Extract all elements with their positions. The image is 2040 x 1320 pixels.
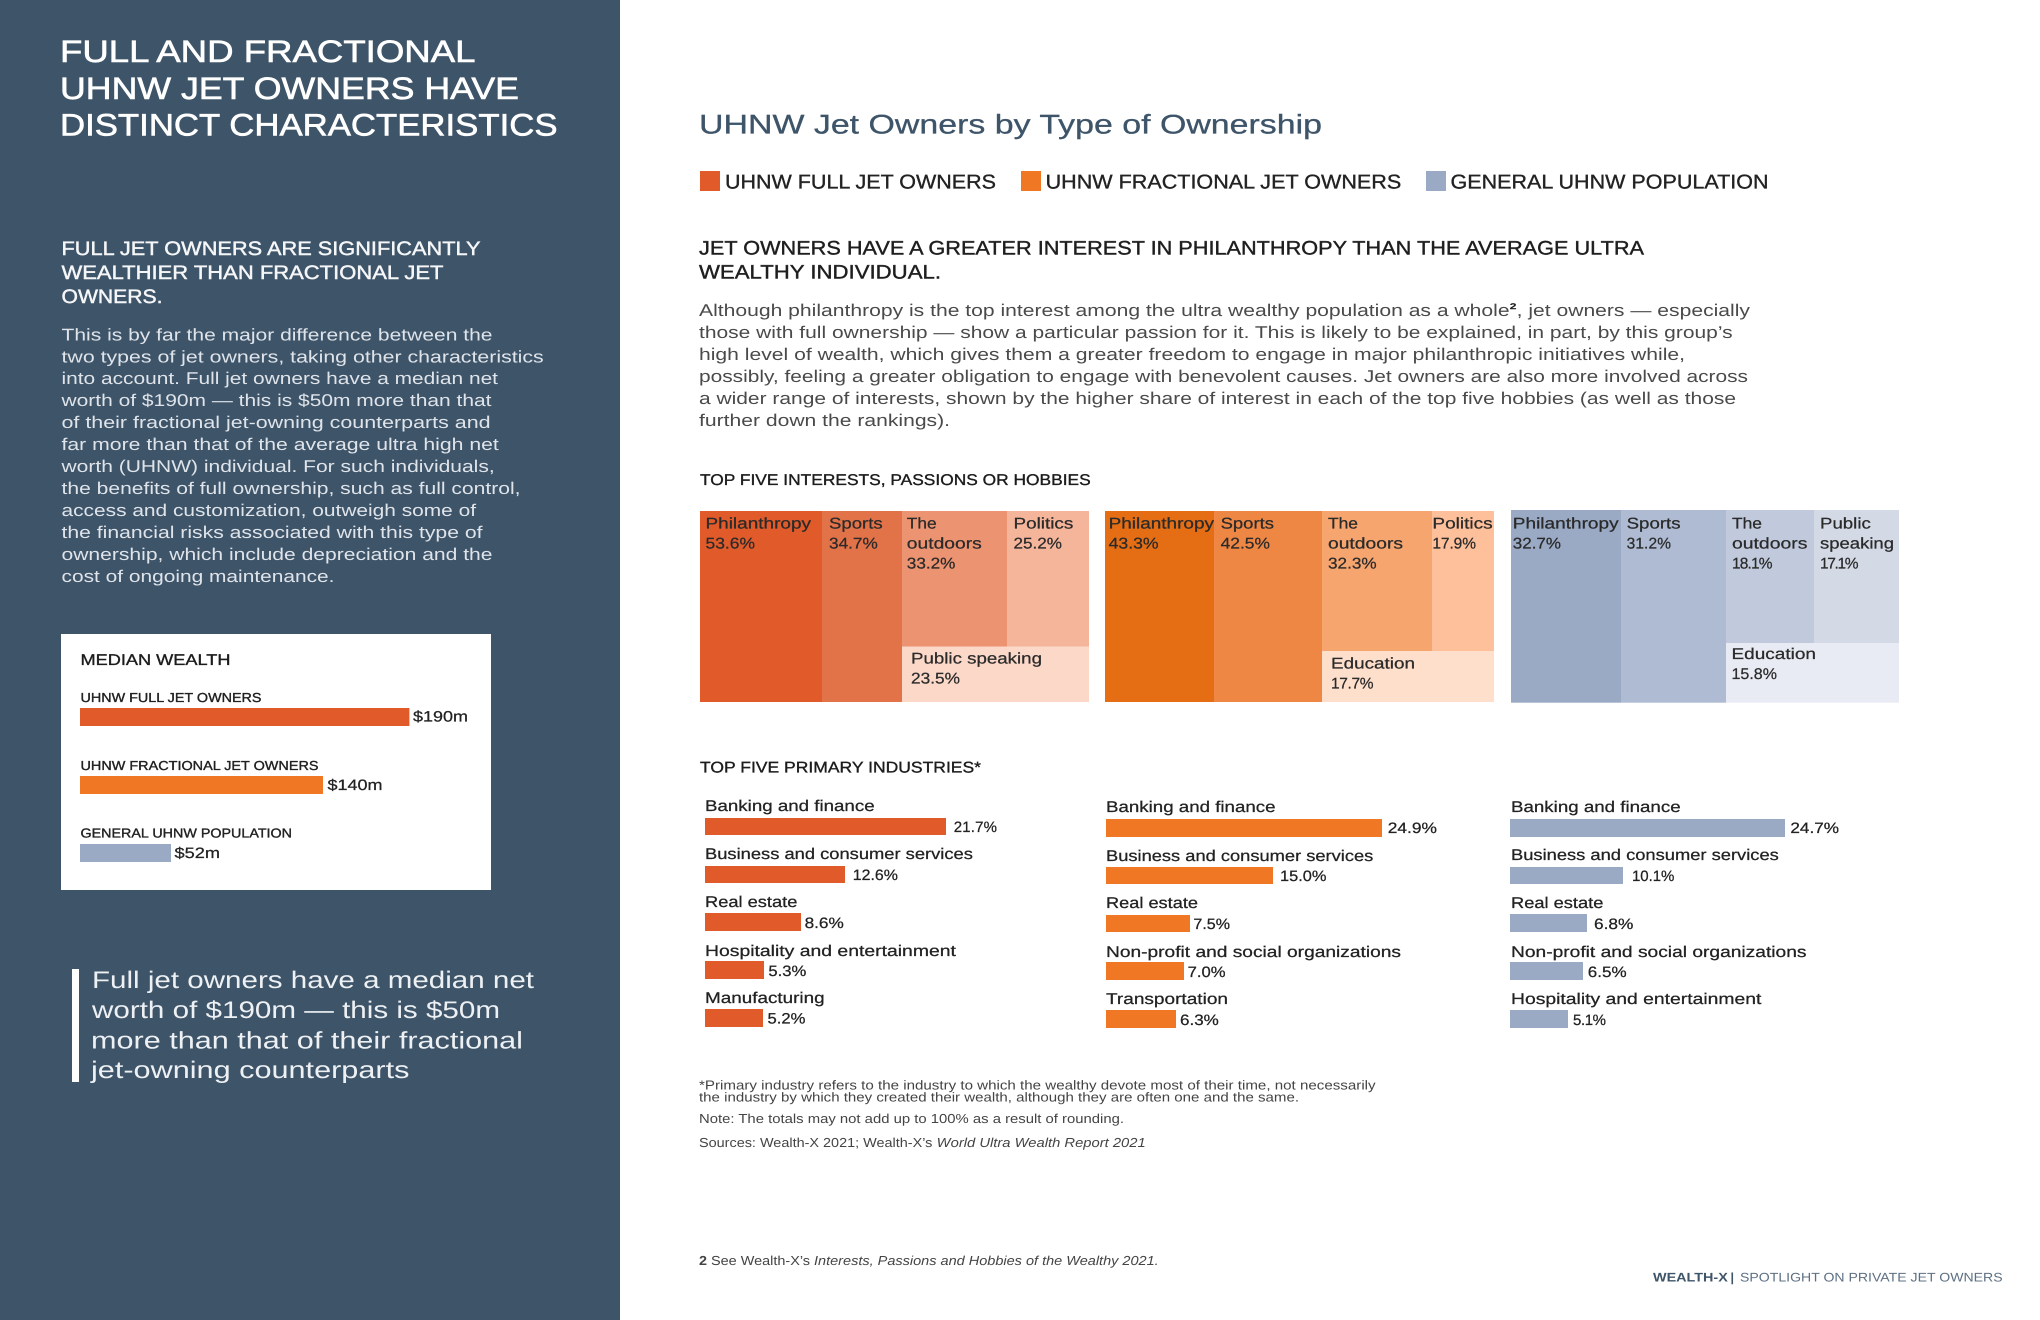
Public speaking 23.5% [902, 647, 1089, 702]
The outdoors 32.3% [1322, 511, 1432, 651]
legend: full owners: UHNW FULL JET OWNERS [725, 172, 996, 194]
Politics 17.9%: 17.9% [1432, 535, 1476, 552]
treemap: general UHNW population [1511, 510, 1899, 703]
bar chart: fractional jet owners industries: Banking and finance [1106, 799, 1276, 816]
legend: general population: GENERAL UHNW POPULATION [1450, 172, 1768, 194]
The outdoors 18.1%: outdoors [1732, 535, 1808, 552]
bar chart: general population industries: 5.1% [1573, 1012, 1606, 1029]
left body text: the benefits of full ownership, such as full control, [62, 479, 520, 498]
bar chart: general population industries: 6.8% [1594, 916, 1633, 933]
left body text: into account. Full jet owners have a median net [62, 369, 498, 388]
page footer: SPOTLIGHT ON PRIVATE JET OWNERS [1740, 1271, 2003, 1285]
philanthropy body text: Although philanthropy is the top interest among the ultra wealthy population as a whole [699, 301, 1352, 320]
The outdoors 33.2%: 33.2% [907, 555, 956, 572]
bar chart: full jet owners industries: 5.3% [768, 963, 806, 980]
Philanthropy 32.7%: Philanthropy [1513, 515, 1619, 532]
Philanthropy 43.3%: Philanthropy [1109, 515, 1214, 532]
title: FULL AND FRACTIONAL [60, 34, 475, 69]
panel: median wealth [61, 634, 491, 890]
left subheading: FULL JET OWNERS ARE SIGNIFICANTLY [62, 238, 480, 260]
bar chart: general population industries: 6.5% [1588, 964, 1627, 981]
bar chart: fractional jet owners industries: 15.0% [1280, 868, 1326, 885]
philanthropy body text: ² [1510, 300, 1517, 319]
left body text: This is by far the major difference between the [62, 325, 492, 344]
industries heading: TOP FIVE PRIMARY INDUSTRIES* [700, 760, 981, 776]
page footnote 2: See Wealth-X’s [711, 1253, 811, 1268]
The outdoors 32.3%: 32.3% [1328, 555, 1377, 572]
bar chart: fractional jet owners industries: Business and consumer services [1106, 848, 1374, 865]
philanthropy body text: a wider range of interests, shown by the higher share of interest in each of the top five hobbies (as well as those [699, 389, 1736, 408]
bar: full owners $190m [80, 690, 468, 726]
bar: fractional owners $140m: UHNW FRACTIONAL JET OWNERS [80, 758, 319, 773]
page footer: WEALTH-X [1653, 1271, 1729, 1285]
legend: fractional owners: UHNW FRACTIONAL JET OWNERS [1046, 172, 1401, 194]
The outdoors 33.2%: The [907, 515, 937, 532]
The outdoors 18.1%: The [1732, 515, 1762, 532]
Public speaking 17.1%: 17.1% [1820, 555, 1859, 572]
bar chart: full jet owners industries: 12.6% [853, 867, 898, 884]
bar chart: general population industries: 24.7% [1790, 820, 1839, 837]
bar chart: full jet owners industries: 5.2% [768, 1010, 805, 1027]
bar chart: fractional jet owners industries: 24.9% [1388, 820, 1437, 837]
bar chart: full jet owners industries: Banking and finance [705, 798, 875, 815]
bar: general population $52m [80, 825, 292, 862]
philanthropy body text [699, 300, 1751, 430]
legend [700, 171, 1768, 194]
left body text: two types of jet owners, taking other characteristics [62, 347, 544, 366]
bar chart: full jet owners industries: Hospitality and entertainment [705, 943, 957, 960]
bar chart: general population industries: 10.1% [1632, 868, 1674, 885]
bar: general population $52m: $52m [174, 845, 220, 862]
title: DISTINCT CHARACTERISTICS [60, 108, 558, 143]
bar chart: fractional jet owners industries: 7.0% [1188, 964, 1226, 981]
page footer: | [1730, 1271, 1734, 1285]
footnotes: Sources: Wealth-X 2021; Wealth-X’s [699, 1135, 933, 1150]
bar chart: fractional jet owners industries: 7.5% [1193, 916, 1230, 933]
bar: full owners $190m: UHNW FULL JET OWNERS [80, 690, 262, 705]
title: UHNW JET OWNERS HAVE [60, 71, 519, 106]
Politics 17.9%: Politics [1432, 515, 1493, 532]
bar: general population $52m: GENERAL UHNW POPULATION [80, 825, 292, 840]
Sports 31.2%: Sports [1627, 515, 1681, 532]
page footnote 2 [699, 1253, 1159, 1268]
The outdoors 33.2% [902, 511, 1007, 647]
Philanthropy 43.3%: 43.3% [1109, 535, 1159, 552]
median wealth heading: MEDIAN WEALTH [80, 652, 230, 669]
Public speaking 23.5%: Public speaking [911, 650, 1042, 667]
bar chart: full jet owners industries: Manufacturing [705, 990, 825, 1007]
bar chart: general population industries: Business and consumer services [1511, 847, 1779, 864]
page footer [1653, 1271, 2003, 1285]
The outdoors 32.3%: The [1328, 515, 1358, 532]
left body text: the financial risks associated with this type of [62, 523, 483, 542]
Philanthropy 53.6% [700, 511, 822, 702]
left body text [60, 325, 544, 586]
philanthropy body text: , jet owners — especially [1517, 301, 1751, 320]
bar chart: full jet owners industries [705, 798, 997, 1027]
left subheading: WEALTHIER THAN FRACTIONAL JET [62, 262, 444, 284]
philanthropy body text: further down the rankings). [699, 411, 950, 430]
left body text: access and customization, outweigh some of [62, 501, 476, 520]
Sports 31.2% [1621, 510, 1726, 703]
bar chart: full jet owners industries: Real estate [705, 894, 797, 911]
left subheading [62, 238, 480, 308]
Education 17.7% [1322, 651, 1494, 702]
Sports 31.2%: 31.2% [1627, 535, 1671, 552]
Philanthropy 53.6%: 53.6% [706, 535, 755, 552]
left panel background [0, 0, 620, 1320]
Education 15.8%: Education [1732, 646, 1816, 663]
philanthropy heading [699, 238, 1644, 284]
left subheading: OWNERS. [62, 286, 162, 308]
Education 15.8%: 15.8% [1732, 666, 1777, 683]
The outdoors 32.3%: outdoors [1328, 535, 1403, 552]
philanthropy body text: possibly, feeling a greater obligation to engage with benevolent causes. Jet owners are also more involved across [699, 367, 1748, 386]
bar chart: fractional jet owners industries: 6.3% [1180, 1012, 1219, 1029]
bar chart: full jet owners industries: Business and consumer services [705, 846, 973, 863]
Public speaking 17.1%: speaking [1820, 535, 1894, 552]
philanthropy heading: JET OWNERS HAVE A GREATER INTEREST IN PHILANTHROPY THAN THE AVERAGE ULTRA [699, 238, 1644, 260]
bar chart: fractional jet owners industries: Non-profit and social organizations [1106, 944, 1401, 961]
Politics 25.2%: Politics [1014, 515, 1074, 532]
bar chart: general population industries [1510, 799, 1839, 1029]
footnotes: *Primary industry refers to the industry to which the wealthy devote most of their time, not necessarily [699, 1077, 1376, 1092]
Education 15.8% [1726, 643, 1899, 703]
treemap: full jet owners [700, 511, 1089, 702]
interests heading: TOP FIVE INTERESTS, PASSIONS OR HOBBIES [700, 472, 1091, 489]
Philanthropy 43.3% [1105, 511, 1214, 702]
Public speaking 17.1%: Public [1820, 515, 1871, 532]
Education 17.7%: Education [1331, 655, 1415, 672]
Politics 25.2%: 25.2% [1014, 535, 1062, 552]
bar: full owners $190m: $190m [413, 709, 468, 726]
Sports 34.7% [822, 511, 902, 702]
Philanthropy 53.6%: Philanthropy [706, 515, 811, 532]
bar chart: full jet owners industries: 8.6% [805, 915, 844, 932]
treemap: fractional jet owners [1105, 511, 1494, 702]
title [60, 34, 558, 143]
The outdoors 33.2%: outdoors [907, 535, 982, 552]
philanthropy body text: those with full ownership — show a particular passion for it. This is likely to be explained, in part, by this group’s [699, 323, 1733, 342]
left body text: worth (UHNW) individual. For such individuals, [60, 457, 495, 476]
Public speaking 17.1% [1814, 510, 1899, 643]
Sports 42.5%: 42.5% [1221, 535, 1270, 552]
left body text: cost of ongoing maintenance. [62, 567, 334, 586]
philanthropy body text: high level of wealth, which gives them a greater freedom to engage in major philanthropic initiatives while, [699, 345, 1685, 364]
bar: fractional owners $140m [80, 758, 382, 794]
footnotes: World Ultra Wealth Report 2021 [937, 1135, 1146, 1150]
Sports 34.7%: 34.7% [829, 535, 878, 552]
The outdoors 18.1% [1726, 510, 1814, 643]
bar chart: general population industries: Hospitality and entertainment [1511, 991, 1762, 1008]
Sports 34.7%: Sports [829, 515, 883, 532]
bar: fractional owners $140m: $140m [328, 777, 382, 794]
left body text: worth of $190m — this is $50m more than that [60, 391, 492, 410]
page footnote 2: 2 [699, 1253, 707, 1268]
pull quote: jet-owning counterparts [90, 1057, 409, 1084]
Politics 17.9% [1432, 511, 1494, 651]
bar chart: general population industries: Real estate [1511, 895, 1603, 912]
bar chart: general population industries: Banking and finance [1511, 799, 1681, 816]
Philanthropy 32.7%: 32.7% [1513, 535, 1561, 552]
chart heading: UHNW Jet Owners by Type of Ownership [699, 109, 1322, 139]
bar chart: full jet owners industries: 21.7% [954, 819, 997, 836]
footnotes: Note: The totals may not add up to 100% as a result of rounding. [699, 1111, 1124, 1126]
Philanthropy 32.7% [1511, 510, 1621, 703]
Politics 25.2% [1007, 511, 1089, 647]
Education 17.7%: 17.7% [1331, 675, 1374, 692]
philanthropy heading: WEALTHY INDIVIDUAL. [699, 262, 941, 284]
bar chart: general population industries: Non-profit and social organizations [1511, 944, 1807, 961]
bar chart: fractional jet owners industries: Transportation [1106, 991, 1228, 1008]
footnotes [699, 1077, 1376, 1150]
left body text: of their fractional jet-owning counterparts and [62, 413, 491, 432]
pull quote: more than that of their fractional [91, 1028, 523, 1054]
The outdoors 18.1%: 18.1% [1732, 555, 1773, 572]
left body text: ownership, which include depreciation and the [62, 545, 492, 564]
Sports 42.5% [1214, 511, 1322, 702]
pull quote [72, 967, 534, 1084]
Public speaking 23.5%: 23.5% [911, 670, 960, 687]
pull quote: Full jet owners have a median net [92, 967, 534, 994]
bar chart: fractional jet owners industries: Real estate [1106, 895, 1198, 912]
pull quote: worth of $190m — this is $50m [91, 997, 500, 1024]
bar chart: fractional jet owners industries [1106, 799, 1437, 1029]
page footnote 2: Interests, Passions and Hobbies of the Wealthy 2021. [814, 1253, 1159, 1268]
left body text: far more than that of the average ultra high net [62, 435, 499, 454]
footnotes: the industry by which they created their wealth, although they are often one and the same. [699, 1090, 1299, 1105]
Sports 42.5%: Sports [1221, 515, 1274, 532]
